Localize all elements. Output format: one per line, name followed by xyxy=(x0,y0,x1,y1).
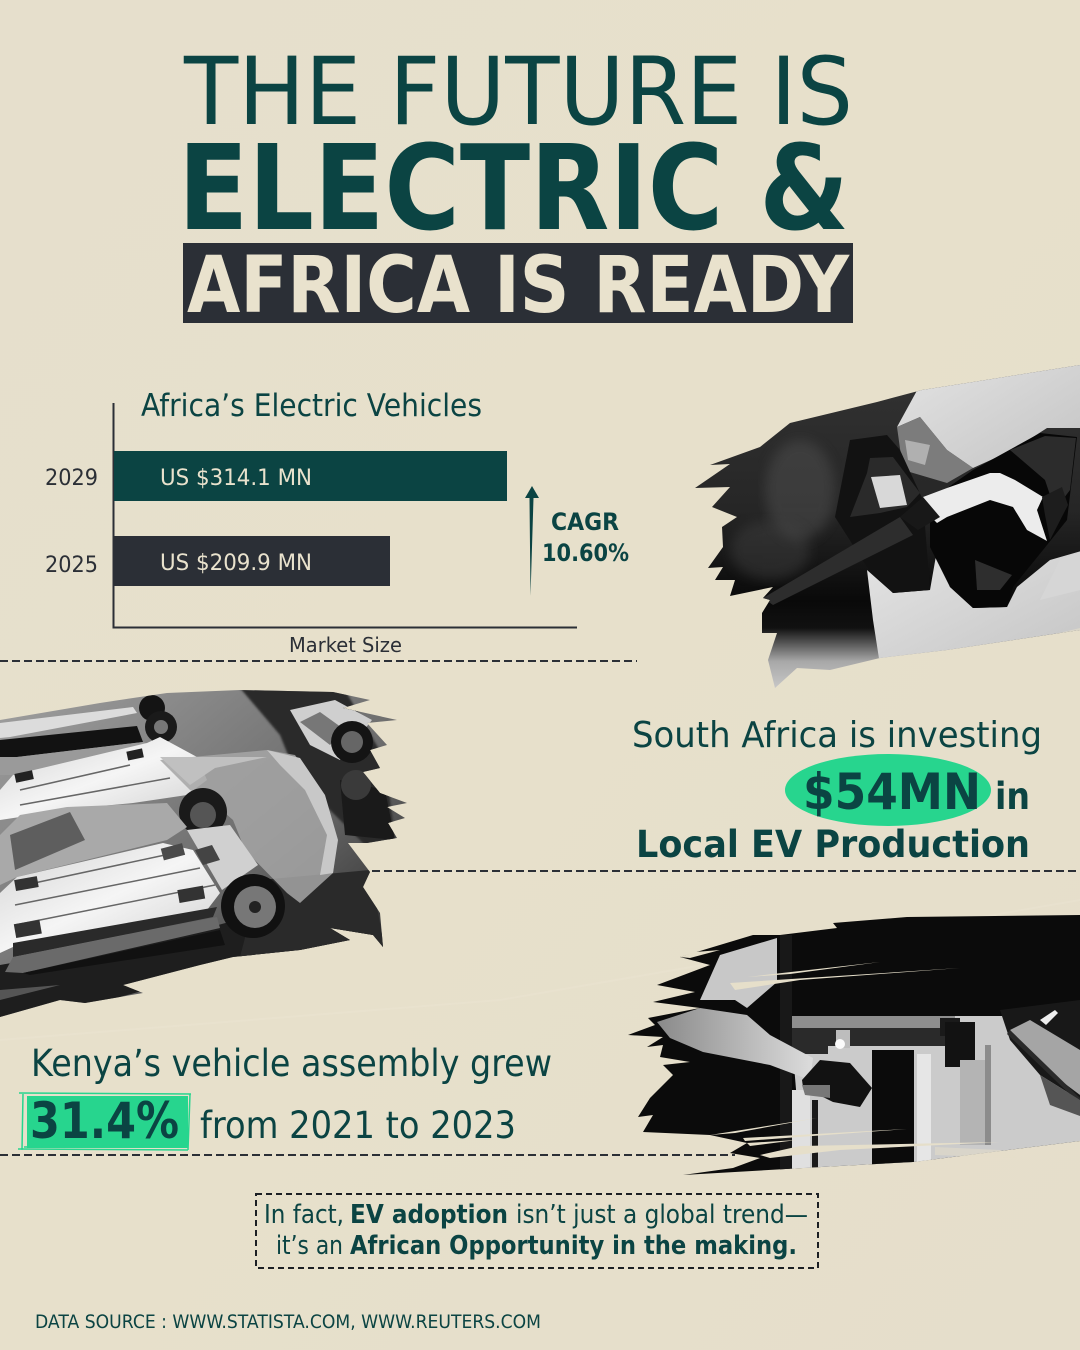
closing callout: EV adoption xyxy=(350,1200,508,1230)
glove xyxy=(802,1060,872,1107)
green highlight ellipse xyxy=(785,754,991,826)
brush streaks over assembly photo xyxy=(680,950,1017,1158)
glass over main chassis xyxy=(0,803,187,885)
green highlight box xyxy=(18,1093,191,1150)
South Africa investing text block xyxy=(632,715,1042,866)
bar 2029 xyxy=(114,451,507,501)
white sleeve xyxy=(700,938,777,1008)
title: AFRICA IS READY xyxy=(187,241,850,331)
battery comb strip xyxy=(13,907,217,957)
car hood xyxy=(897,355,1080,468)
Kenya vehicle assembly text block: Kenya’s vehicle assembly grew xyxy=(31,1042,552,1085)
closing callout: isn’t just a global trend— xyxy=(516,1200,808,1230)
flap sticker xyxy=(871,475,907,508)
bar 2025 xyxy=(114,536,390,586)
closing callout: In fact, xyxy=(264,1200,344,1230)
Kenya vehicle assembly text block xyxy=(18,1042,552,1150)
photo: workers on EV assembly line xyxy=(620,910,1080,1180)
arrow and CAGR callout xyxy=(525,486,629,596)
title: ELECTRIC & xyxy=(178,119,849,257)
dashed divider middle xyxy=(372,870,1080,872)
bar 2029: US $314.1 MN xyxy=(160,466,312,491)
photo: EV charging plug xyxy=(690,355,1080,695)
arrow and CAGR callout: CAGR xyxy=(551,508,619,536)
headlight xyxy=(897,417,973,483)
factory background xyxy=(790,1016,1080,1175)
dashed divider top xyxy=(0,660,637,662)
arrow and CAGR callout: 10.60% xyxy=(542,539,629,567)
main battery deck xyxy=(0,843,220,953)
charging cable xyxy=(763,517,913,605)
closing callout: it’s an xyxy=(276,1231,343,1261)
charging port opening xyxy=(930,433,1077,608)
bar chart: Africa's electric vehicles market size: Market Size xyxy=(289,633,402,657)
bar chart: Africa's electric vehicles market size xyxy=(45,388,577,657)
data source: DATA SOURCE : WWW.STATISTA.COM, WWW.REUTERS.COM xyxy=(35,1311,541,1333)
rear chassis xyxy=(0,707,137,738)
dashed divider bottom xyxy=(0,1154,735,1156)
plug handle xyxy=(923,473,1047,541)
South Africa investing text block: South Africa is investing xyxy=(632,715,1042,756)
dark reflection behind top car xyxy=(240,688,395,850)
closing callout xyxy=(256,1194,818,1268)
Kenya vehicle assembly text block: 31.4% xyxy=(30,1092,179,1150)
door pillar xyxy=(780,935,792,1175)
lower body xyxy=(867,550,1080,665)
title xyxy=(178,38,853,331)
bar chart: Africa's electric vehicles market size: 2025 xyxy=(45,553,98,578)
charging flap xyxy=(835,435,930,593)
South Africa investing text block: $54MN xyxy=(803,763,981,821)
title: THE FUTURE IS xyxy=(183,38,853,147)
right worker and clipboard xyxy=(1000,1000,1080,1100)
South Africa investing text block: Local EV Production xyxy=(636,823,1030,866)
bar 2025: US $209.9 MN xyxy=(160,551,312,576)
Kenya vehicle assembly text block: from 2021 to 2023 xyxy=(200,1104,516,1147)
bar chart: Africa's electric vehicles market size: 2029 xyxy=(45,466,98,491)
middle chassis xyxy=(0,737,207,820)
transparent car shell xyxy=(160,750,337,903)
photo: EV skateboard chassis xyxy=(0,685,410,1030)
chart title: Africa’s Electric Vehicles xyxy=(141,388,482,424)
South Africa investing text block: in xyxy=(995,775,1030,818)
closing callout: African Opportunity in the making. xyxy=(350,1231,797,1261)
arm xyxy=(657,1008,813,1080)
dark floor bottom xyxy=(0,923,383,1017)
